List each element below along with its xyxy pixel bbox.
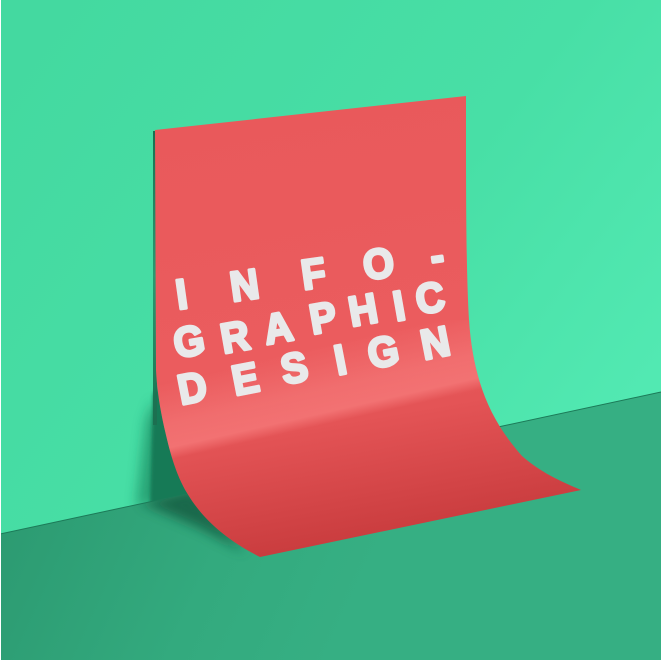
title line: INFO-: [173, 231, 447, 318]
title line: GRAPHIC: C: [412, 272, 448, 324]
title line: DESIGN: N: [417, 317, 454, 369]
wall and floor seam: [0, 392, 661, 534]
title line: GRAPHIC: R: [217, 311, 253, 363]
red curled poster sheet: [150, 96, 581, 557]
title line: DESIGN: G: [364, 326, 403, 378]
shadow on wall behind poster: [136, 131, 195, 508]
title line: GRAPHIC: [170, 272, 448, 367]
poster title: INFO- GRAPHIC DESIGN: [170, 231, 454, 414]
title line: GRAPHIC: I: [389, 282, 409, 330]
floor: [0, 392, 661, 661]
title line: DESIGN: I: [330, 336, 350, 384]
title line: INFO-: F: [298, 249, 329, 299]
poster gloss highlight: [158, 329, 481, 456]
title line: INFO-: N: [227, 260, 262, 311]
title line: DESIGN: D: [174, 362, 211, 414]
title line: DESIGN: [174, 317, 454, 414]
title line: INFO-: -: [427, 231, 447, 280]
title line: DESIGN: E: [228, 353, 263, 405]
title line: INFO-: O: [360, 238, 397, 289]
title line: INFO-: I: [173, 270, 190, 318]
title line: GRAPHIC: G: [170, 315, 208, 367]
title line: GRAPHIC: P: [306, 292, 340, 343]
title line: DESIGN: S: [277, 342, 312, 394]
title line: GRAPHIC: H: [345, 284, 381, 336]
shadow on floor beside poster: [141, 494, 244, 552]
title line: GRAPHIC: A: [260, 302, 296, 354]
